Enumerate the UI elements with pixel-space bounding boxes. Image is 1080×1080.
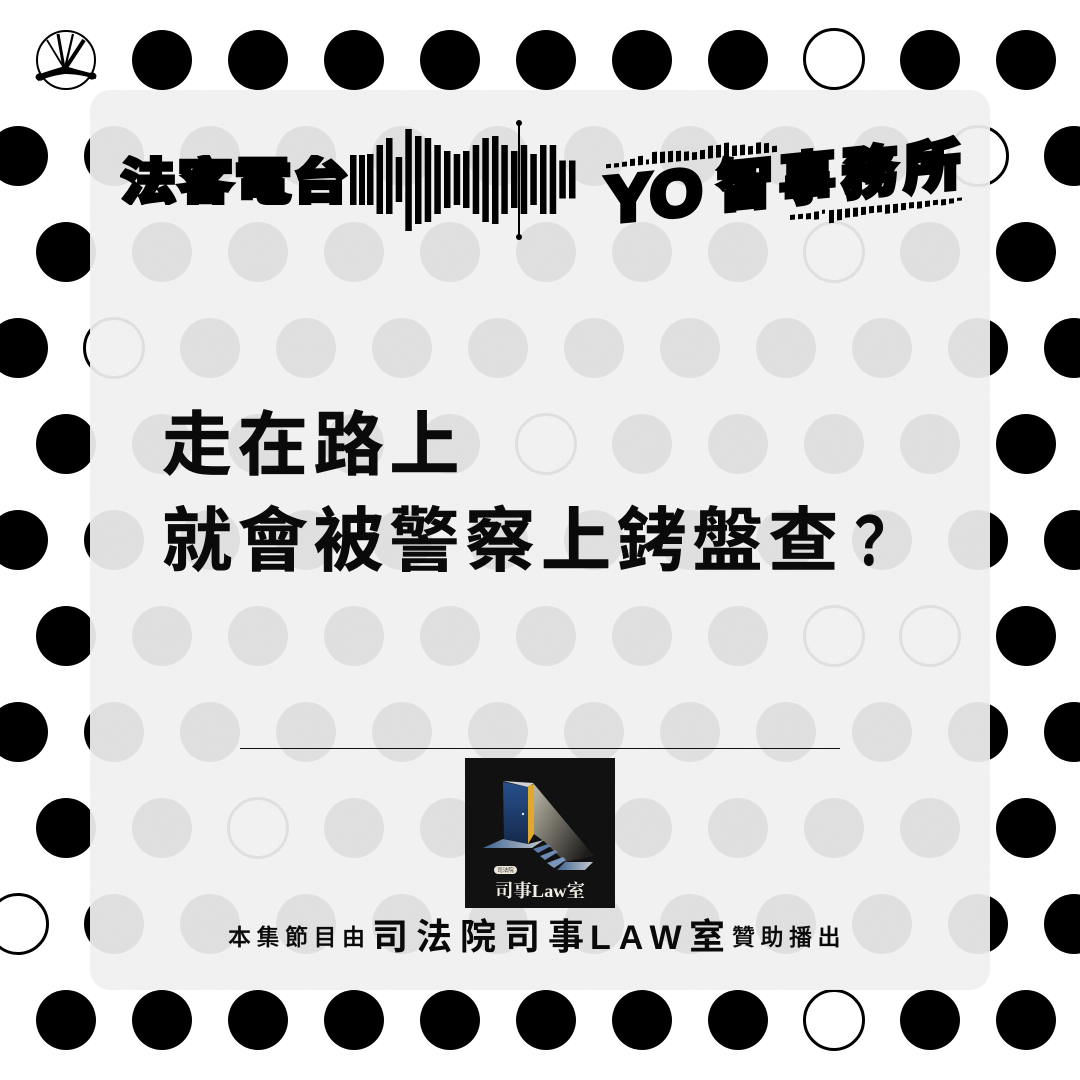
light beam: [534, 784, 594, 862]
sponsor line: 本集節目由: [228, 924, 370, 950]
icon: sound waveform: [350, 120, 576, 240]
heading: YO law firm logotype: [606, 120, 962, 236]
divider: [240, 748, 840, 749]
sponsor line: 室: [689, 916, 725, 957]
podcast cover artwork: 司法院: [497, 866, 514, 874]
main title: 就會被警察上銬盤查: [162, 502, 844, 580]
icon: brand logo with radiating lines: [36, 31, 96, 89]
firm name: 智事務所: [717, 120, 960, 224]
panel: translucent card: [90, 90, 990, 990]
heading: radio show name: 法客電台: [120, 143, 350, 214]
sponsor line: 司法院司事: [372, 916, 592, 957]
main title: [162, 406, 896, 580]
stairs: [533, 844, 551, 853]
main title: ？: [843, 505, 896, 579]
YO letters: YO: [606, 155, 702, 236]
sponsor line: 贊助播出: [732, 924, 846, 950]
open door: [503, 782, 528, 844]
sponsor line: LAW: [590, 919, 690, 957]
main title: 走在路上: [162, 406, 465, 484]
cover title: 司事Law室: [495, 880, 585, 901]
bottom dashed equaliser strip: [790, 196, 962, 227]
cover badge: [494, 866, 517, 874]
sponsor line: [228, 916, 846, 957]
podcast cover artwork: [465, 758, 615, 908]
landing: [483, 839, 544, 848]
top dashed equaliser strip: [606, 138, 777, 168]
